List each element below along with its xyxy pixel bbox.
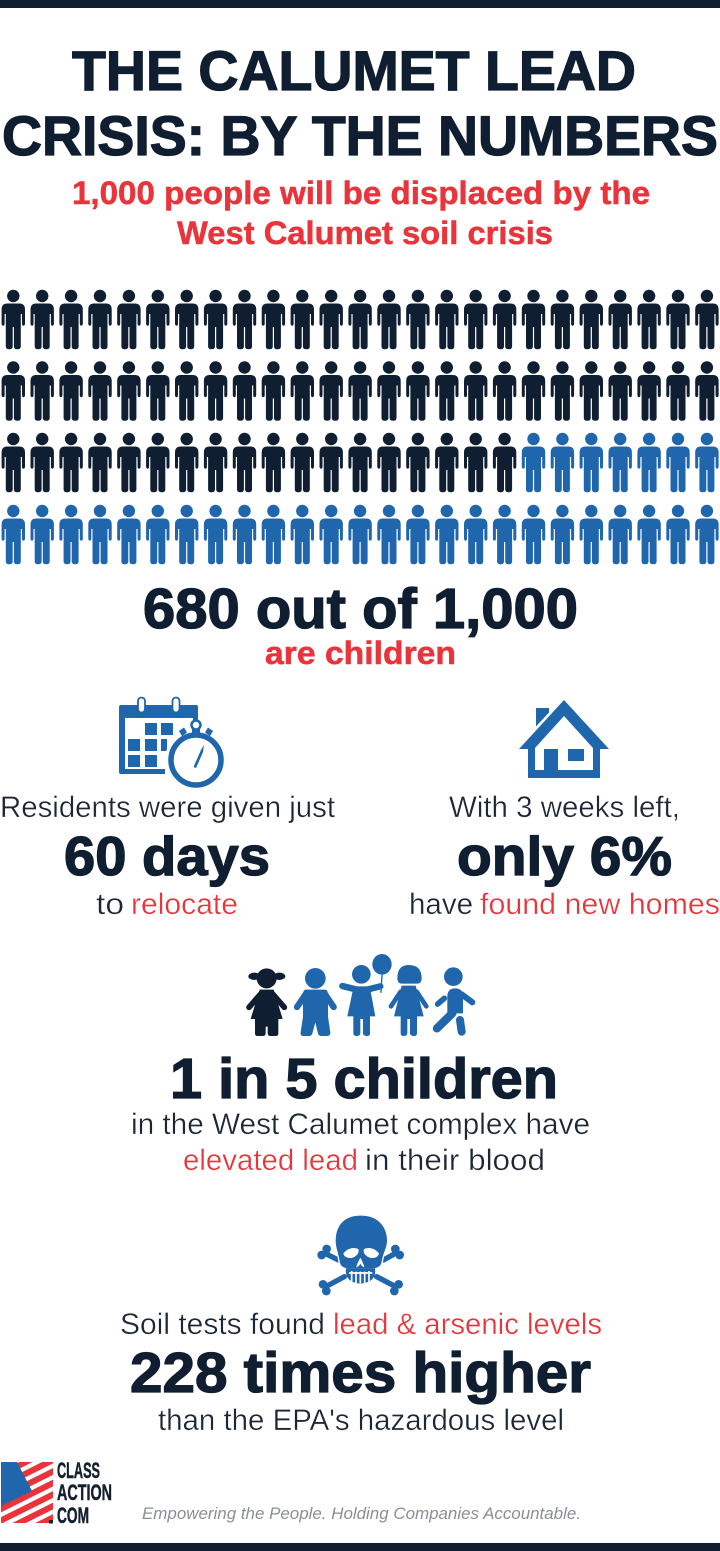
logo: ClassAction.com	[1, 1462, 112, 1524]
crossbones	[317, 1245, 404, 1295]
logo wordmark	[49, 1458, 112, 1528]
top bar	[0, 0, 720, 8]
pictogram: 680 of 1,000 people	[2, 290, 719, 564]
logo wordmark: ACTION	[57, 1480, 112, 1505]
row 4 of people	[2, 505, 719, 564]
icon: children	[248, 954, 472, 1036]
text: 1 in 5 children	[131, 1047, 590, 1177]
text: only 6% found new homes	[409, 791, 720, 921]
title: CRISIS: BY THE NUMBERS	[2, 104, 718, 167]
text: only 6% found new homes: found new homes	[480, 888, 720, 921]
stat: 680 out of 1,000 are children: 680 out of 1,000	[143, 577, 578, 641]
logo flag	[1, 1462, 53, 1523]
row 1 of people	[2, 290, 719, 349]
text: only 6% found new homes: only 6%	[457, 825, 672, 887]
tagline: Empowering the People. Holding Companies Accountable.	[142, 1504, 581, 1523]
text: 228 times higher: Soil tests found	[120, 1308, 325, 1341]
text: only 6% found new homes: have	[409, 888, 473, 921]
text: 60 days to relocate: relocate	[131, 888, 238, 921]
text: 60 days to relocate: 60 days	[64, 825, 270, 887]
child girl	[391, 965, 426, 1036]
text: 60 days to relocate	[0, 791, 335, 921]
child with balloon	[342, 954, 392, 1036]
skull	[335, 1215, 388, 1269]
text: 228 times higher	[120, 1308, 602, 1437]
row 3 of people	[2, 433, 719, 492]
text: 1 in 5 children: in the West Calumet complex have	[131, 1108, 590, 1141]
icon: house	[519, 700, 609, 778]
title	[2, 39, 718, 167]
icon: skull and crossbones	[317, 1215, 404, 1295]
bottom bar	[0, 1543, 720, 1551]
text: 60 days to relocate: to	[96, 888, 124, 921]
text: 1 in 5 children: 1 in 5 children	[170, 1047, 558, 1111]
child boy	[297, 968, 334, 1036]
text: 60 days to relocate: Residents were given just	[0, 791, 335, 824]
subtitle: 1,000 people will be displaced by the	[72, 175, 650, 211]
logo wordmark: CLASS	[57, 1458, 100, 1483]
text: 228 times higher: than the EPA's hazardous level	[158, 1404, 564, 1437]
stat: 680 out of 1,000 are children: are children	[265, 635, 456, 671]
text: 228 times higher: 228 times higher	[130, 1341, 591, 1405]
subtitle: West Calumet soil crisis	[177, 215, 553, 251]
stat: 680 out of 1,000 are children	[143, 577, 578, 671]
title: THE CALUMET LEAD	[72, 39, 636, 102]
child walking	[437, 967, 472, 1032]
child with pigtails	[248, 968, 285, 1036]
text: 1 in 5 children: elevated lead	[183, 1144, 358, 1177]
subtitle	[72, 175, 650, 251]
row 2 of people	[2, 361, 719, 421]
icon: calendar and stopwatch	[119, 698, 221, 785]
text: 1 in 5 children: in their blood	[365, 1144, 545, 1177]
text: 228 times higher: lead & arsenic levels	[333, 1308, 602, 1341]
logo wordmark: COM	[57, 1503, 89, 1528]
text: only 6% found new homes: With 3 weeks left,	[449, 791, 680, 824]
